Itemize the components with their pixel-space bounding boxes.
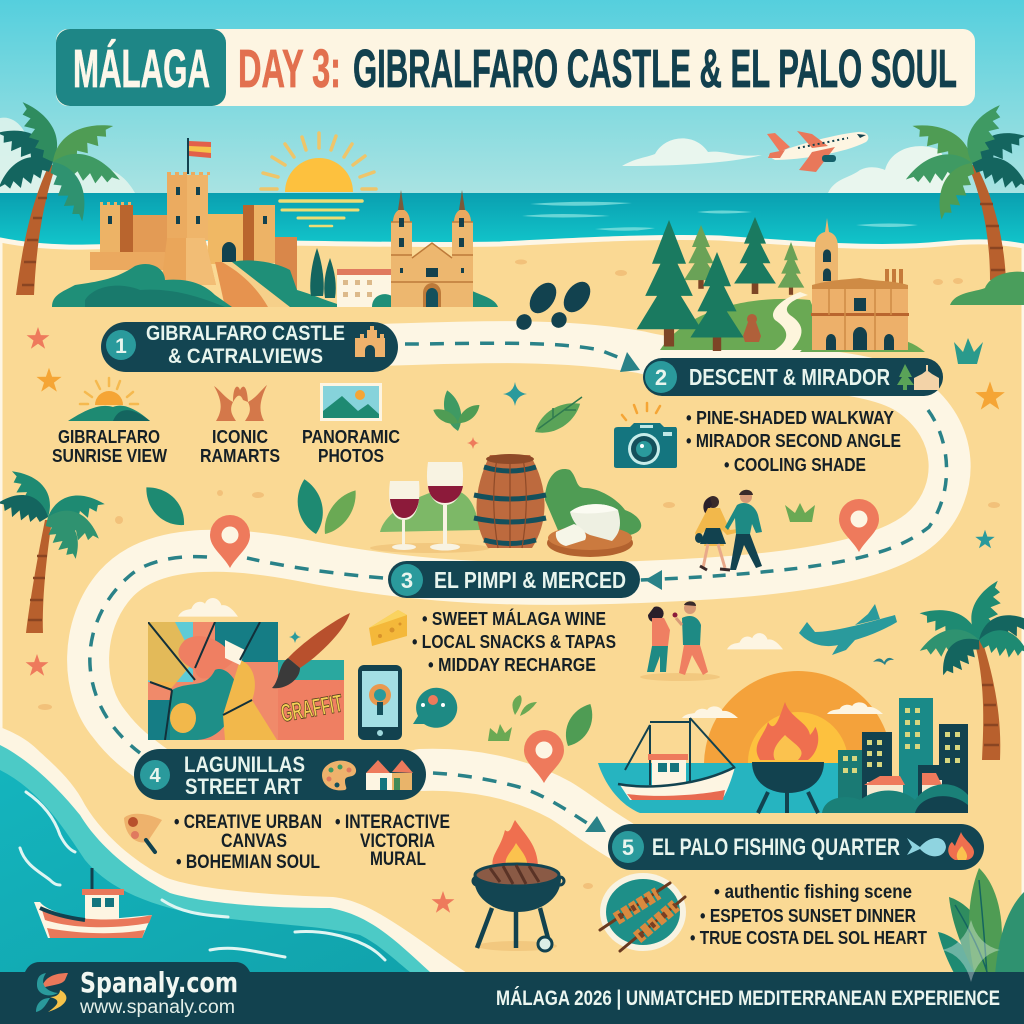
section 1 labels bbox=[52, 426, 400, 466]
cypress trees bbox=[310, 248, 336, 298]
icon: tree bbox=[897, 364, 914, 390]
section 2 text: • COOLING SHADE bbox=[724, 454, 866, 475]
pill 1: Gibralfaro Castle: & CATRALVIEWS bbox=[168, 345, 323, 368]
Gibralfaro castle on hill bbox=[52, 138, 350, 307]
section 1 labels: GIBRALFARO bbox=[58, 426, 160, 447]
footer bar bbox=[0, 962, 1024, 1024]
phone icon with bubble bbox=[358, 665, 457, 740]
leaves and grass bbox=[138, 338, 983, 751]
fishing boat bottom left bbox=[34, 868, 152, 938]
sunrise over sea bbox=[261, 133, 376, 226]
couple walking on road bbox=[695, 490, 762, 570]
pill 5: El Palo Fishing Quarter bbox=[608, 824, 984, 870]
teal airplane bbox=[799, 604, 897, 655]
section 4 text: • INTERACTIVE bbox=[335, 812, 450, 833]
section 3 text: • MIDDAY RECHARGE bbox=[428, 654, 596, 675]
icon: castle bbox=[355, 326, 385, 357]
large grill with flame bbox=[473, 820, 564, 951]
section 4 text: • BOHEMIAN SOUL bbox=[176, 852, 320, 873]
section 4 text bbox=[174, 812, 450, 873]
pill 1: Gibralfaro Castle bbox=[101, 322, 398, 372]
tropical plant bottom right bbox=[938, 868, 1024, 975]
background sky bbox=[0, 0, 1024, 194]
section 1 labels: ICONIC bbox=[212, 426, 268, 447]
pill 4: Lagunillas Street Art: LAGUNILLAS bbox=[184, 752, 305, 777]
pill 3: El Pimpi and Merced: 3 bbox=[401, 568, 413, 593]
pill 5: El Palo Fishing Quarter: EL PALO FISHING QUARTER bbox=[652, 834, 900, 861]
pill 1: Gibralfaro Castle: GIBRALFARO CASTLE bbox=[146, 322, 345, 345]
skewers plate bbox=[600, 873, 686, 951]
illustration: wine, barrel and cheese bbox=[370, 454, 641, 557]
clouds in the sky bbox=[0, 118, 960, 193]
cathedral left bbox=[372, 190, 498, 307]
section 1 labels: SUNRISE VIEW bbox=[52, 445, 167, 466]
section 1 icons bbox=[68, 378, 382, 421]
icon: chapel bbox=[914, 365, 939, 390]
sand dots bbox=[38, 260, 1000, 889]
section 5 text: • ESPETOS SUNSET DINNER bbox=[700, 905, 916, 926]
section 4 text: MURAL bbox=[370, 849, 426, 870]
brand url: www.spanaly.com bbox=[79, 997, 235, 1018]
pine trees and green hill bbox=[637, 217, 830, 351]
section 1 labels: RAMARTS bbox=[200, 445, 280, 466]
white town building bbox=[337, 269, 391, 307]
title banner bbox=[56, 29, 975, 106]
bottom left sea bbox=[0, 727, 470, 975]
logo mark bbox=[36, 973, 68, 1012]
icon: palette bbox=[322, 761, 356, 790]
background sea horizon bbox=[0, 193, 1024, 248]
palm tree top right bbox=[902, 99, 1024, 305]
title: day: DAY 3: bbox=[238, 39, 341, 99]
palm tree mid right bbox=[915, 576, 1024, 760]
route arrowheads bbox=[585, 352, 662, 832]
section 5 text bbox=[690, 882, 928, 948]
decorative stars and sparkles bbox=[26, 327, 1005, 913]
couple with wine bbox=[640, 601, 720, 681]
icon: houses bbox=[366, 760, 413, 790]
palm tree top left bbox=[0, 96, 124, 295]
illustration: street art graffiti wall bbox=[148, 613, 350, 740]
scenic road and dashed route bbox=[88, 342, 950, 840]
section 3 text: • SWEET MÁLAGA WINE bbox=[422, 608, 606, 629]
Málaga cathedral right bbox=[800, 218, 925, 352]
harbour scene: boat, sunset grill, city bbox=[598, 671, 968, 814]
watermark sparkle bbox=[942, 920, 1000, 982]
palm tree mid left bbox=[0, 463, 107, 633]
section 2 text: • MIRADOR SECOND ANGLE bbox=[686, 430, 901, 451]
sea wave highlights bbox=[522, 202, 918, 231]
camera icon bbox=[614, 403, 677, 468]
pill 4: Lagunillas Street Art: STREET ART bbox=[185, 774, 302, 799]
airplane bbox=[767, 131, 868, 172]
pill 5: El Palo Fishing Quarter: 5 bbox=[622, 835, 634, 860]
pill 2: Descent and Mirador bbox=[643, 358, 943, 396]
pill 2: Descent and Mirador: 2 bbox=[655, 365, 667, 390]
cloud mid left bbox=[178, 598, 238, 617]
section 5 text: • TRUE COSTA DEL SOL HEART bbox=[690, 927, 928, 948]
section 1 labels: PANORAMIC bbox=[302, 426, 400, 447]
graffiti word: GRAFFIT bbox=[279, 689, 345, 728]
section 3 text: • LOCAL SNACKS & TAPAS bbox=[412, 631, 616, 652]
pill 3: El Pimpi and Merced: EL PIMPI & MERCED bbox=[434, 567, 626, 593]
icon: flame bbox=[948, 832, 974, 860]
icon: fish bbox=[907, 838, 946, 856]
section 3 text bbox=[412, 608, 616, 675]
section 2 text: • PINE-SHADED WALKWAY bbox=[686, 407, 895, 428]
pill 2: Descent and Mirador: DESCENT & MIRADOR bbox=[689, 364, 890, 390]
section 4 text: VICTORIA bbox=[360, 831, 435, 852]
pill 1: Gibralfaro Castle: 1 bbox=[115, 335, 127, 358]
pill 4: Lagunillas Street Art bbox=[134, 749, 426, 800]
sand beach bbox=[0, 237, 1024, 1024]
pill 3: El Pimpi and Merced bbox=[388, 561, 640, 598]
section 1 labels: PHOTOS bbox=[318, 445, 384, 466]
footprints bbox=[513, 277, 596, 333]
section 4 text: • CREATIVE URBAN bbox=[174, 812, 322, 833]
brand name: Spanaly.com bbox=[80, 966, 238, 999]
section 5 text: • authentic fishing scene bbox=[714, 882, 912, 903]
cheese wedge bbox=[369, 610, 407, 646]
pin: route markers bbox=[210, 499, 879, 783]
small bird bbox=[873, 658, 894, 665]
title: city: MÁLAGA bbox=[73, 39, 210, 99]
section 2 text bbox=[686, 407, 901, 475]
section 4 text: CANVAS bbox=[221, 831, 287, 852]
pill 4: Lagunillas Street Art: 4 bbox=[149, 765, 161, 787]
section 4 brush icon bbox=[124, 814, 162, 852]
cloud mid right bbox=[727, 633, 783, 649]
